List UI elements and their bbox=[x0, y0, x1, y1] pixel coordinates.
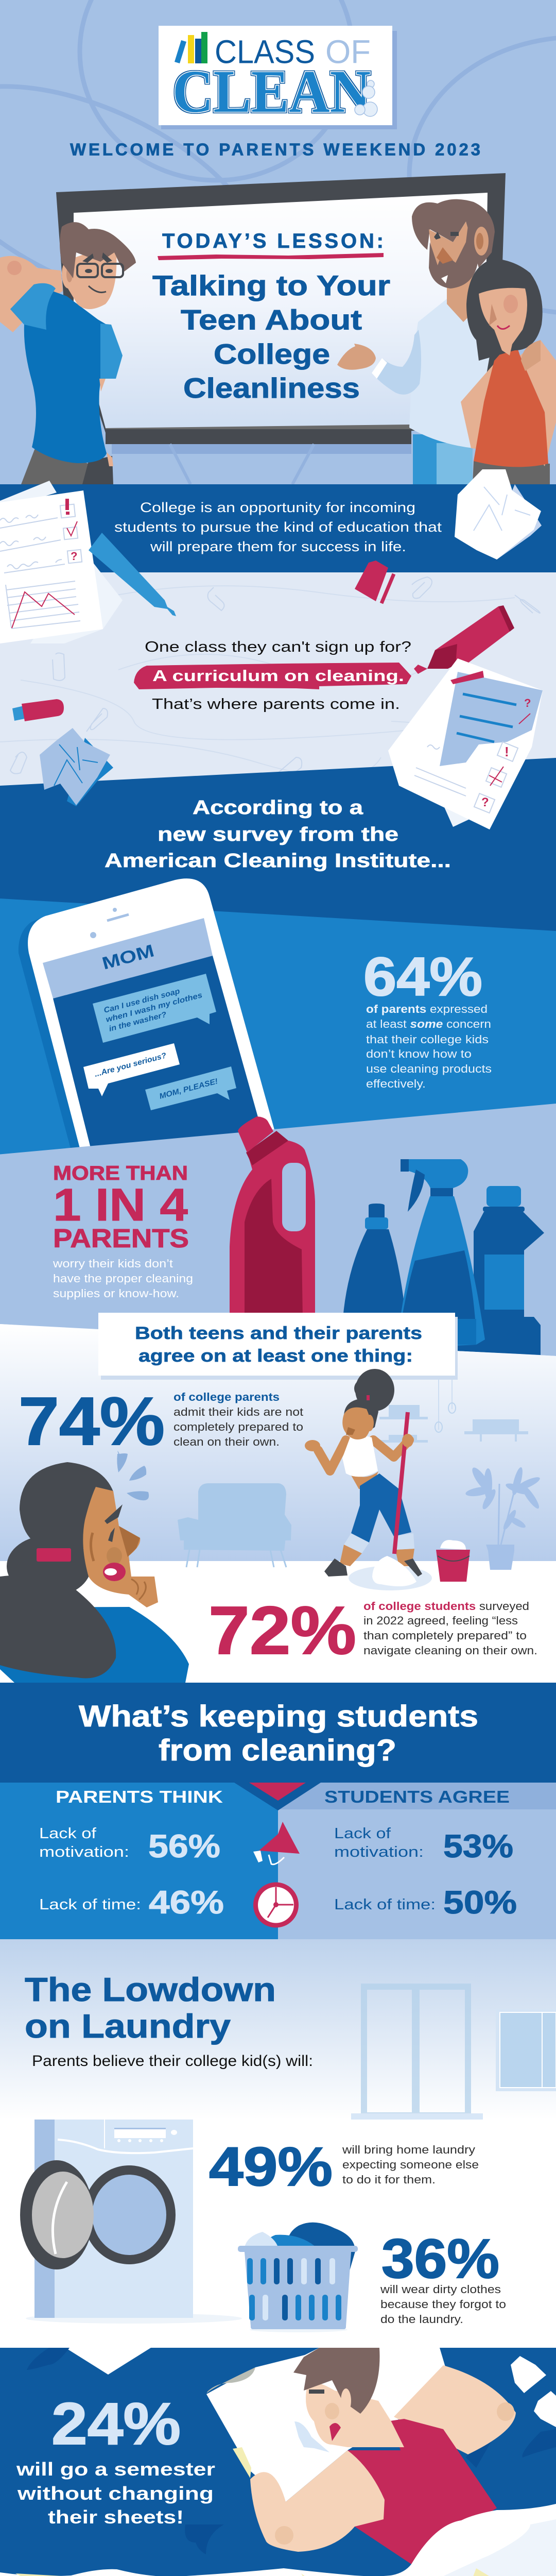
stat: 64% of parents: that their college kids bbox=[366, 1033, 489, 1046]
stat: 36%: because they forgot to bbox=[380, 2298, 506, 2311]
illustration: sleeping student bbox=[206, 2348, 516, 2564]
icon: clock bbox=[253, 1883, 299, 1928]
stat: 24% sheets: will go a semester bbox=[16, 2459, 215, 2480]
subtitle: welcome: WELCOME TO PARENTS WEEKEND 2023 bbox=[70, 140, 480, 159]
heading: today's lesson: Teen About bbox=[181, 304, 362, 336]
chat bubble: mom please bbox=[145, 1066, 236, 1110]
heading: today's lesson bbox=[152, 230, 390, 404]
illustration: test paper: ? bbox=[481, 795, 489, 809]
icon: red marker bbox=[414, 605, 514, 674]
logo: Class of Clean: CLASS bbox=[215, 33, 315, 70]
callout: a curriculum on cleaning bbox=[134, 663, 411, 689]
stat: 72% of college students: navigate cleaning on their own. bbox=[363, 1644, 537, 1657]
panel: students agree: 53% bbox=[443, 1828, 513, 1865]
section: what's keeping students bbox=[0, 1683, 556, 1783]
icon: blue highlighter bbox=[89, 533, 176, 616]
stat: 72% of college students: of college students surveyed bbox=[363, 1600, 529, 1613]
illustration: test paper: ? bbox=[524, 697, 531, 709]
stat: 49%: will bring home laundry bbox=[342, 2143, 475, 2156]
stat: 1 in 4 parents: PARENTS bbox=[53, 1224, 189, 1253]
panel: bed section bbox=[0, 2348, 556, 2576]
logo: Class of Clean: CLEAN bbox=[172, 58, 371, 125]
stat: 64% of parents: effectively. bbox=[366, 1077, 426, 1090]
stat: 24% sheets bbox=[16, 2391, 215, 2528]
box: both teens and parents: Both teens and their parents bbox=[135, 1324, 422, 1343]
stat: 74% of college parents: clean on their own. bbox=[173, 1435, 280, 1448]
heading: lowdown on laundry: on Laundry bbox=[25, 2007, 231, 2045]
stat: 36% bbox=[380, 2227, 506, 2326]
stat: 64% of parents: don’t know how to bbox=[366, 1047, 472, 1060]
stat: 24% sheets: 24% bbox=[51, 2391, 181, 2457]
stat: 24% sheets: without changing bbox=[17, 2483, 214, 2504]
heading: according to a new survey: new survey from the bbox=[158, 824, 398, 845]
heading: lowdown on laundry: The Lowdown bbox=[25, 1971, 276, 2008]
logo: Class of Clean: OF bbox=[325, 33, 371, 70]
stat: 1 in 4 parents: worry their kids don’t bbox=[53, 1257, 173, 1270]
panel: parents think bbox=[0, 1783, 278, 1939]
character: father with beard bbox=[337, 199, 495, 484]
stat: 1 in 4 parents: have the proper cleaning bbox=[53, 1272, 193, 1285]
stat: 72% of college students: 72% bbox=[208, 1592, 356, 1668]
chat bubble: question: in the washer? bbox=[108, 1010, 167, 1033]
character: mother bbox=[461, 259, 556, 484]
panel: students agree bbox=[278, 1783, 556, 1939]
panel: intro band bbox=[0, 484, 556, 572]
panel: parents think: Lack of time: bbox=[39, 1896, 141, 1913]
box: both teens and parents: agree on at least one thing: bbox=[138, 1346, 413, 1366]
stat: 49% bbox=[209, 2136, 479, 2197]
stat: 1 in 4 parents: 1 IN 4 bbox=[53, 1179, 188, 1230]
panel: students agree: 50% bbox=[443, 1885, 517, 1921]
panel: parents think: 56% bbox=[148, 1828, 220, 1865]
stat: 64% of parents bbox=[363, 946, 492, 1090]
box: both teens and parents bbox=[98, 1313, 458, 1380]
panel: 64% section background bbox=[0, 899, 556, 1175]
illustration: blanket bbox=[0, 2504, 556, 2576]
panel: laundry background bbox=[0, 1939, 556, 2120]
illustration: test paper bbox=[388, 658, 543, 829]
stat: 64% of parents: of parents expressed bbox=[366, 1003, 488, 1015]
illustration: test paper: ! bbox=[505, 744, 509, 759]
stat: 64% of parents: at least some concern bbox=[366, 1018, 491, 1030]
chat bubble: reply bbox=[83, 1043, 180, 1096]
section: what's keeping students: What’s keeping students bbox=[79, 1700, 478, 1733]
stat: 36%: will wear dirty clothes bbox=[380, 2283, 501, 2296]
stat: 49%: to do it for them. bbox=[342, 2173, 436, 2186]
icon: crumpled paper blue bbox=[40, 728, 113, 806]
callout: a curriculum on cleaning: A curriculum on cleaning. bbox=[152, 667, 404, 685]
stat: 74% of college parents: completely prepared to bbox=[173, 1420, 303, 1433]
intro text: students to pursue the kind of education that bbox=[114, 519, 442, 535]
heading: today's lesson: Cleanliness bbox=[183, 372, 360, 404]
panel: parents think: 46% bbox=[149, 1885, 224, 1921]
text: MOM: MOM bbox=[100, 941, 157, 974]
heading: according to a new survey bbox=[105, 797, 451, 872]
stat: 74% of college parents bbox=[19, 1383, 303, 1459]
section: survey band bbox=[0, 758, 556, 943]
character: worried parent bbox=[0, 1462, 189, 1683]
character: student with mop bbox=[305, 1369, 470, 1590]
stat: 1 in 4 parents: MORE THAN bbox=[53, 1162, 188, 1184]
stat: 72% of college students: than completely prepared” to bbox=[363, 1629, 527, 1642]
panel: laundry white area bbox=[0, 2120, 556, 2348]
icon: usb stick bbox=[12, 699, 64, 721]
panel: parents think: motivation: bbox=[39, 1844, 129, 1860]
stat: 1 in 4 parents: supplies or know-how. bbox=[53, 1287, 179, 1300]
section: what's keeping students: from cleaning? bbox=[159, 1734, 396, 1767]
icon: crumpled paper white bbox=[455, 469, 542, 560]
panel: 1 in 4 section background bbox=[0, 1104, 556, 1356]
stat: 74% of college parents: 74% bbox=[19, 1383, 165, 1459]
text: one class: One class they can't sign up for? bbox=[145, 639, 411, 655]
stat: 36%: do the laundry. bbox=[380, 2313, 463, 2326]
heading: lowdown on laundry bbox=[25, 1971, 313, 2070]
illustration: phone bbox=[19, 878, 275, 1154]
illustration: washing machine bbox=[20, 2120, 242, 2324]
stat: 64% of parents: use cleaning products bbox=[366, 1062, 492, 1075]
illustration: room furniture bbox=[178, 1376, 542, 1570]
stat: 36%: 36% bbox=[381, 2227, 499, 2290]
whiteboard bbox=[56, 173, 506, 484]
heading: lowdown on laundry: Parents believe their college kid(s) will: bbox=[32, 2053, 313, 2070]
heading: today's lesson: TODAY’S LESSON: bbox=[162, 230, 384, 252]
heading: according to a new survey: American Cleaning Institute... bbox=[105, 850, 451, 872]
panel: students agree: Lack of time: bbox=[334, 1896, 436, 1913]
panel: agree section room bbox=[0, 1324, 556, 1683]
icon: red detergent bottle bbox=[230, 1116, 315, 1319]
heading: today's lesson: College bbox=[214, 338, 330, 370]
stat: 74% of college parents: of college parents bbox=[173, 1391, 280, 1403]
icon: plant bbox=[465, 1465, 542, 1570]
icon: cleaning bottles bbox=[342, 1159, 544, 1355]
stat: 72% of college students bbox=[208, 1592, 537, 1668]
stat: 1 in 4 parents bbox=[53, 1162, 193, 1300]
stat: 24% sheets: their sheets! bbox=[48, 2506, 184, 2528]
panel: parents think: Lack of bbox=[39, 1825, 97, 1842]
intro text: will prepare them for success in life. bbox=[150, 539, 406, 554]
icon: megaphone bbox=[253, 1822, 300, 1865]
panel: parents think: PARENTS THINK bbox=[56, 1787, 223, 1806]
chat bubble: question: Can I use dish soap bbox=[103, 987, 181, 1015]
heading: according to a new survey: According to a bbox=[193, 797, 363, 819]
chat bubble: reply: ...Are you serious? bbox=[94, 1051, 167, 1079]
illustration: notes on desk bbox=[0, 481, 123, 643]
character: father with glasses bbox=[0, 222, 136, 484]
panel: students agree: Lack of bbox=[334, 1825, 391, 1842]
icon: sweat drops bbox=[117, 1451, 149, 1500]
intro text: College is an opportunity for incoming bbox=[140, 500, 415, 515]
chat bubble: question: when I wash my clothes bbox=[105, 991, 203, 1024]
panel: desk background bbox=[0, 572, 556, 794]
logo: Class of Clean bbox=[159, 26, 397, 129]
illustration: notes on desk: ? bbox=[71, 550, 77, 563]
panel: hero background bbox=[0, 0, 556, 484]
stat: 49%: expecting someone else bbox=[342, 2158, 479, 2171]
illustration: laundry basket bbox=[238, 2223, 358, 2332]
intro text bbox=[114, 500, 442, 554]
icon: bucket bbox=[436, 1540, 470, 1582]
chat bubble: mom please: MOM, PLEASE! bbox=[159, 1077, 219, 1101]
icon: chevron divider bbox=[234, 1783, 321, 1810]
stat: 64% of parents: 64% bbox=[363, 946, 482, 1007]
icon: red clip bbox=[355, 561, 394, 603]
chat bubble: question bbox=[93, 974, 216, 1043]
panel: students agree: STUDENTS AGREE bbox=[324, 1787, 510, 1806]
text: where parents come in: That’s where parents come in. bbox=[152, 696, 400, 713]
stat: 74% of college parents: admit their kids are not bbox=[173, 1405, 303, 1418]
panel: students agree: motivation: bbox=[334, 1844, 424, 1860]
stat: 49%: 49% bbox=[209, 2136, 333, 2197]
illustration: windows bbox=[351, 1984, 556, 2126]
stat: 72% of college students: in 2022 agreed, feeling “less bbox=[363, 1614, 518, 1627]
heading: today's lesson: Talking to Your bbox=[152, 269, 390, 301]
icon: crumpled papers bbox=[511, 2356, 556, 2427]
